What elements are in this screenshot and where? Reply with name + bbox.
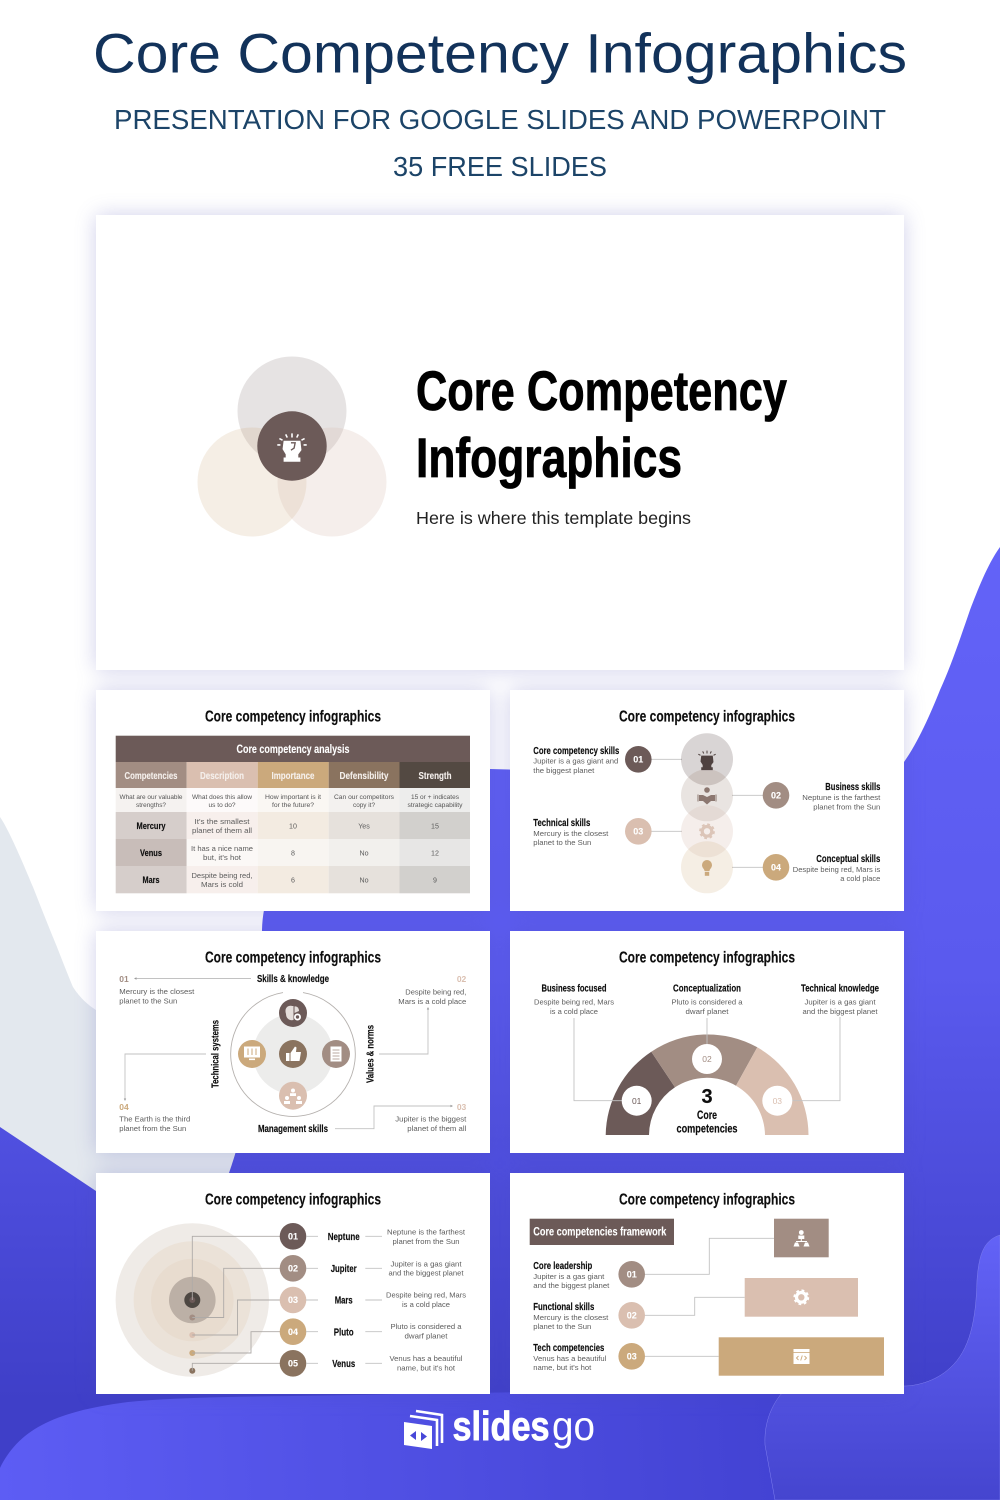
label: management skills: Management skills xyxy=(258,1123,328,1135)
planet names: Jupiter xyxy=(331,1263,357,1275)
panel: concentric circles slide xyxy=(96,1173,490,1394)
table: planet of them all xyxy=(192,827,252,835)
table: Mars is cold xyxy=(201,881,243,889)
note 01: planet to the Sun xyxy=(119,998,177,1006)
bar with code icon xyxy=(719,1337,884,1376)
note 02: 02 xyxy=(457,974,467,984)
planet descriptions: name, but it's hot xyxy=(397,1364,455,1372)
text: core competency skills: Jupiter is a gas giant and xyxy=(533,758,618,766)
note 03: Jupiter is the biggest xyxy=(395,1116,466,1124)
panel: framework slide xyxy=(510,1173,904,1394)
text: business focused: is a cold place xyxy=(550,1008,598,1016)
planet descriptions xyxy=(386,1229,466,1372)
slide shadows xyxy=(96,215,904,1394)
text: business skills: Neptune is the farthest xyxy=(802,794,880,802)
centre label xyxy=(676,1086,738,1136)
background shape: indigo wave xyxy=(0,547,1000,1500)
table: Core competency analysis xyxy=(236,744,350,756)
table: 10 xyxy=(289,822,297,830)
text: technical knowledge: Jupiter is a gas giant xyxy=(804,999,876,1007)
table: us to do? xyxy=(208,802,236,809)
table: Can our competitors xyxy=(334,794,394,801)
label: values and norms: Values & norms xyxy=(364,1025,376,1083)
connector lines xyxy=(574,1017,840,1101)
slide heading: Core competency infographics xyxy=(205,708,381,726)
number badges: 02 xyxy=(771,790,781,800)
cover subtitle: Here is where this template begins xyxy=(416,508,691,528)
text: business skills: Business skills xyxy=(825,781,880,793)
text: technical skills xyxy=(533,817,608,847)
text: technical skills: Technical skills xyxy=(533,817,590,829)
arrowheads xyxy=(124,977,453,1107)
icon: fist with rays xyxy=(277,433,307,462)
centre label: Core xyxy=(697,1110,717,1122)
text: conceptual skills: Despite being red, Mars is xyxy=(793,866,881,874)
panel: semicircle slide xyxy=(510,931,904,1153)
text: core competency skills: Core competency skills xyxy=(533,745,619,757)
table: Strength xyxy=(418,770,452,782)
number badges: 03 xyxy=(288,1295,298,1305)
table: It's the smallest xyxy=(194,818,250,826)
slide heading: Core competency infographics xyxy=(619,708,795,726)
cover heading: Core Competency xyxy=(416,359,787,422)
text: functional skills: Mercury is the closest xyxy=(533,1314,608,1322)
table: 15 xyxy=(431,822,439,830)
text: conceptualization xyxy=(672,983,743,1016)
table: Yes xyxy=(358,822,370,830)
label: skills and knowledge: Skills & knowledge xyxy=(257,973,329,985)
table: Despite being red, xyxy=(192,872,253,880)
number badges xyxy=(618,1261,645,1370)
text: business focused: Business focused xyxy=(542,983,606,995)
bar with gear icon xyxy=(745,1278,858,1317)
slide heading: Core competency infographics xyxy=(205,1192,381,1208)
panel: analysis table slide xyxy=(96,690,490,911)
table: Mars xyxy=(142,875,160,886)
text: core leadership: Core leadership xyxy=(533,1260,592,1272)
title: Core Competency Infographics xyxy=(93,22,907,84)
text: business skills: planet from the Sun xyxy=(813,803,880,811)
text: functional skills: Functional skills xyxy=(533,1301,594,1313)
text: tech competencies: Tech competencies xyxy=(533,1342,604,1354)
slide heading: Core competency infographics xyxy=(619,1192,795,1208)
note 03 xyxy=(395,1102,467,1133)
framework label xyxy=(530,1219,674,1245)
label: technical systems: Technical systems xyxy=(210,1020,222,1088)
note 01 xyxy=(119,974,194,1006)
icon: thumbs up xyxy=(279,1040,307,1068)
text: business focused xyxy=(534,983,614,1016)
note 01: Mercury is the closest xyxy=(119,988,194,996)
number badges: 02 xyxy=(627,1310,637,1320)
text: tech competencies: name, but it's hot xyxy=(533,1364,591,1372)
text: technical skills: planet to the Sun xyxy=(533,839,591,847)
table: 15 or + indicates xyxy=(411,794,459,801)
table: It has a nice name xyxy=(191,845,253,853)
table: strategic capability xyxy=(408,802,463,809)
number badges: 05 xyxy=(288,1358,298,1368)
cover heading xyxy=(416,359,787,489)
text: technical skills: Mercury is the closest xyxy=(533,830,608,838)
planet descriptions: Despite being red, Mars xyxy=(386,1292,466,1300)
connector lines xyxy=(645,1238,774,1356)
connector lines xyxy=(125,978,452,1129)
centre label: competencies xyxy=(676,1124,738,1136)
note 04: planet from the Sun xyxy=(119,1125,186,1133)
arrows xyxy=(306,1236,382,1363)
planet names xyxy=(328,1231,360,1370)
number badges xyxy=(625,746,789,881)
text: technical knowledge: Technical knowledge xyxy=(801,983,879,995)
table: 8 xyxy=(291,850,295,858)
segment markers xyxy=(622,1044,792,1116)
text: technical knowledge: and the biggest planet xyxy=(802,1008,878,1016)
number badges: 01 xyxy=(633,754,643,764)
table: How important is it xyxy=(265,794,321,801)
number badges: 03 xyxy=(633,826,643,836)
text: technical knowledge xyxy=(801,983,879,1016)
note 03: planet of them all xyxy=(407,1125,467,1133)
panel: competency skills slide xyxy=(510,690,904,911)
text: core leadership: Jupiter is a gas giant xyxy=(533,1273,604,1281)
planet descriptions: and the biggest planet xyxy=(388,1270,464,1278)
planet names: Neptune xyxy=(328,1231,360,1243)
note 01: 01 xyxy=(119,974,129,984)
wordmark end: go xyxy=(552,1403,595,1449)
icon: stacked slides xyxy=(404,1411,442,1449)
text: tech competencies: Venus has a beautiful xyxy=(533,1355,607,1363)
panel: main cover slide xyxy=(96,215,904,670)
planet names: Pluto xyxy=(334,1326,354,1338)
number badges xyxy=(280,1223,306,1377)
icon: document xyxy=(322,1040,350,1068)
wheel xyxy=(231,993,355,1116)
text: conceptual skills xyxy=(793,853,881,883)
icon: team xyxy=(279,1082,307,1110)
logo: slidesgo xyxy=(404,1403,595,1449)
table: 9 xyxy=(433,876,437,884)
slide heading: Core competency infographics xyxy=(205,950,381,966)
planet names: Venus xyxy=(332,1358,355,1370)
note 02: Despite being red, xyxy=(405,988,466,996)
table: Defensibility xyxy=(340,770,389,782)
table: Venus xyxy=(140,848,162,859)
icon: monitor xyxy=(238,1040,266,1068)
framework label: Core competencies framework xyxy=(533,1226,667,1238)
note 04 xyxy=(119,1102,190,1133)
text: conceptual skills: a cold place xyxy=(840,875,880,883)
background shape: lower right wave xyxy=(765,1235,1000,1500)
planet descriptions: Pluto is considered a xyxy=(390,1323,462,1331)
concentric circles xyxy=(116,1223,269,1377)
table xyxy=(116,736,470,893)
text: functional skills: planet to the Sun xyxy=(533,1323,591,1331)
text: core competency skills: the biggest planet xyxy=(533,767,594,775)
note 04: 04 xyxy=(119,1102,129,1112)
text: core competency skills xyxy=(533,745,619,775)
text: tech competencies xyxy=(533,1342,607,1372)
subtitle: PRESENTATION FOR GOOGLE SLIDES AND POWERPOINT xyxy=(114,104,886,135)
note 02 xyxy=(398,974,467,1006)
text: core leadership: and the biggest planet xyxy=(533,1282,609,1290)
icon: brain and gear xyxy=(279,999,307,1027)
venn diagram xyxy=(198,356,386,536)
planet descriptions: is a cold place xyxy=(402,1301,450,1309)
background shape: grey wave xyxy=(0,817,300,1210)
connector lines xyxy=(638,759,776,867)
icon: gear xyxy=(700,824,714,838)
centre label: 3 xyxy=(701,1086,713,1108)
note 04: The Earth is the third xyxy=(119,1116,190,1124)
table: What are our valuable xyxy=(120,794,183,801)
slide count: 35 FREE SLIDES xyxy=(393,151,607,182)
table: copy it? xyxy=(353,802,376,809)
number badges: 01 xyxy=(288,1232,298,1242)
table: strengths? xyxy=(136,802,167,809)
segment markers: 02 xyxy=(702,1054,712,1064)
text: conceptualization: Conceptualization xyxy=(673,983,741,995)
panel: skills wheel slide xyxy=(96,931,490,1153)
bar with team icon xyxy=(774,1219,829,1257)
icon: handshake xyxy=(698,787,716,804)
segment markers: 03 xyxy=(773,1096,782,1106)
text: business focused: Despite being red, Mars xyxy=(534,999,614,1007)
table: but, it's hot xyxy=(203,854,241,862)
planet descriptions: Venus has a beautiful xyxy=(390,1355,463,1363)
number badges: 03 xyxy=(627,1352,637,1362)
table: Importance xyxy=(272,770,315,782)
planet descriptions: dwarf planet xyxy=(404,1333,448,1341)
planet names: Mars xyxy=(335,1294,353,1306)
table: Mercury xyxy=(136,821,166,832)
cover heading: Infographics xyxy=(416,426,682,489)
number badges: 01 xyxy=(627,1270,637,1280)
planet descriptions: Jupiter is a gas giant xyxy=(390,1260,462,1268)
table: Description xyxy=(200,770,244,782)
table: for the future? xyxy=(272,802,315,809)
number badges: 04 xyxy=(288,1327,298,1337)
icon: bulb xyxy=(702,860,712,876)
background shape: lower left wave xyxy=(0,1388,800,1500)
table: 12 xyxy=(431,850,439,858)
table: What does this allow xyxy=(192,794,253,801)
text: core leadership xyxy=(533,1260,609,1290)
number badges: 02 xyxy=(288,1264,298,1274)
slide heading: Core competency infographics xyxy=(619,950,795,966)
planet descriptions: Neptune is the farthest xyxy=(387,1229,465,1237)
planet descriptions: planet from the Sun xyxy=(392,1238,460,1246)
icon: fist xyxy=(698,751,716,770)
table: No xyxy=(359,876,369,884)
semicircle chart xyxy=(606,1034,808,1135)
text: conceptualization: Pluto is considered a xyxy=(672,999,743,1007)
table: 6 xyxy=(291,876,295,884)
wordmark: slides xyxy=(452,1403,550,1449)
segment markers: 01 xyxy=(632,1096,642,1106)
text: conceptual skills: Conceptual skills xyxy=(816,853,880,865)
table: No xyxy=(359,850,369,858)
note 02: Mars is a cold place xyxy=(398,998,466,1006)
text: functional skills xyxy=(533,1301,608,1331)
connector lines xyxy=(192,1236,280,1371)
text: business skills xyxy=(802,781,880,811)
note 03: 03 xyxy=(457,1102,467,1112)
number badges: 04 xyxy=(771,862,781,872)
text: conceptualization: dwarf planet xyxy=(686,1008,729,1016)
stacked circles xyxy=(681,733,733,893)
table: Competencies xyxy=(124,770,178,782)
